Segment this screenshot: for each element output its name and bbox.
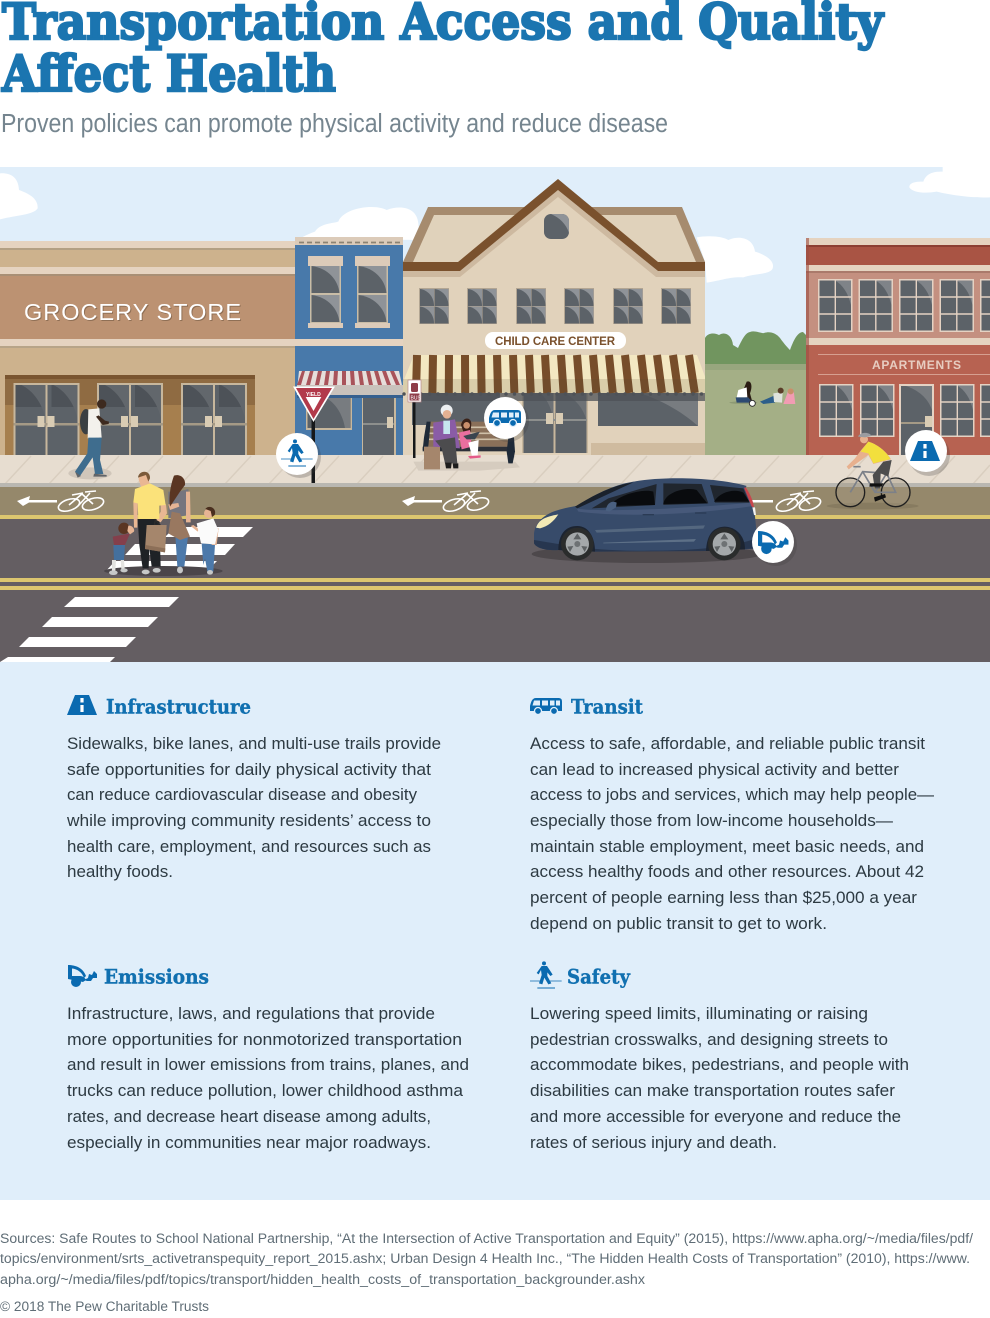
text: safety body: rates of serious injury and death. xyxy=(530,1133,777,1152)
sources: apha.org/~/media/files/pdf/topics/transport/hidden_health_costs_of_transportation_backgrounder.ashx xyxy=(0,1272,645,1287)
icon: bus xyxy=(530,698,562,714)
girl reading xyxy=(459,419,481,459)
illustration: street scene xyxy=(0,167,990,662)
heading: transit: Transit xyxy=(571,694,644,718)
people on the grass xyxy=(729,381,795,406)
text: safety body: and more accessible for everyone and reduce the xyxy=(530,1107,901,1126)
car xyxy=(532,478,762,563)
building: blue shop xyxy=(295,237,403,456)
text: infrastructure body: safe opportunities for daily physical activity that xyxy=(67,760,431,779)
text: transit body: depend on public transit to get to work. xyxy=(530,914,827,933)
crosswalk stripes xyxy=(0,527,253,662)
section: transit xyxy=(530,694,934,933)
sign: child care center xyxy=(485,332,626,349)
text: emissions body: rates, and decrease heart disease among adults, xyxy=(67,1107,431,1126)
text: transit body: maintain stable employment, meet basic needs, and xyxy=(530,837,924,856)
heading: safety: Safety xyxy=(567,964,631,988)
sidewalk xyxy=(0,455,990,487)
text: transit body xyxy=(530,734,934,933)
title: Affect Health xyxy=(1,44,336,103)
title xyxy=(1,0,885,103)
heading: infrastructure: Infrastructure xyxy=(106,694,251,718)
family crossing xyxy=(104,472,223,576)
text: emissions body xyxy=(67,1004,469,1152)
icon: emissions xyxy=(68,965,97,987)
child xyxy=(109,523,134,575)
text: transit body: access to jobs and services, which may help people— xyxy=(530,785,934,804)
sign: grocery store: GROCERY STORE xyxy=(25,300,242,326)
text: infrastructure body: healthy foods. xyxy=(67,862,173,881)
yield sign xyxy=(293,386,335,483)
elderly woman xyxy=(433,405,460,468)
sign: grocery store: GROCERY STORE xyxy=(24,299,241,325)
icon: road xyxy=(67,695,97,715)
icon badge: bus xyxy=(484,397,529,442)
icon: pedestrian xyxy=(530,961,562,988)
person walking with phone xyxy=(68,399,112,479)
subtitle: Proven policies can promote physical activity and reduce disease xyxy=(1,110,668,138)
section: emissions xyxy=(67,964,469,1152)
text: safety body: disabilities can make transportation routes safer xyxy=(530,1081,895,1100)
icon badge: emissions xyxy=(752,521,797,566)
text: emissions body: and result in lower emissions from trains, planes, and xyxy=(67,1055,469,1074)
sources xyxy=(0,1231,973,1287)
text: safety body: Lowering speed limits, illuminating or raising xyxy=(530,1004,868,1023)
text: transit body: access healthy foods and other resources. About 42 xyxy=(530,862,924,881)
boy xyxy=(191,507,219,575)
section: safety xyxy=(530,961,909,1152)
heading: emissions: Emissions xyxy=(104,964,209,988)
bike lane marking xyxy=(17,491,105,514)
awning: red stripes xyxy=(297,371,403,398)
section: infrastructure xyxy=(66,694,441,881)
bus stop sign: BUS xyxy=(410,396,421,402)
text: emissions body: trucks can reduce pollution, lower childhood asthma xyxy=(67,1081,464,1100)
text: emissions body: especially in communities near major roadways. xyxy=(67,1133,431,1152)
text: transit body: can lead to increased physical activity and better xyxy=(530,760,899,779)
bus stop sign xyxy=(408,380,421,458)
sky xyxy=(0,167,990,457)
sources: Sources: Safe Routes to School National Partnership, “At the Intersection of Active Transportation and Equity” (2015), https://www.apha.org/~/media/files/pdf/ xyxy=(0,1231,973,1246)
shopping bag xyxy=(424,447,440,469)
text: emissions body: Infrastructure, laws, and regulations that provide xyxy=(67,1004,435,1023)
text: transit body: especially those from low-income households— xyxy=(530,811,893,830)
text: infrastructure body: health care, employment, and resources such as xyxy=(67,837,431,856)
building: apartments xyxy=(806,238,990,456)
building: grocery store xyxy=(0,241,295,456)
text: transit body: percent of people earning less than $25,000 a year xyxy=(530,888,917,907)
text: emissions body: more opportunities for nonmotorized transportation xyxy=(67,1030,462,1049)
text: transit body: Access to safe, affordable, and reliable public transit xyxy=(530,734,925,753)
clouds xyxy=(0,167,990,283)
sources: topics/environment/srts_activetranspequity_report_2015.ashx; Urban Design 4 Health Inc., “The Hidden Health Costs of Transportation” (2010), https://www. xyxy=(0,1251,970,1266)
bike lane xyxy=(0,487,990,515)
sign: apartments: APARTMENTS xyxy=(872,358,961,372)
text: safety body: accommodate bikes, pedestrians, and people with xyxy=(530,1055,909,1074)
park xyxy=(705,331,806,456)
text: infrastructure body: while improving community residents’ access to xyxy=(66,811,431,830)
man xyxy=(133,472,167,574)
icon badge: pedestrian xyxy=(276,433,321,478)
bench with people xyxy=(413,405,520,471)
panel: policy descriptions xyxy=(0,662,990,1200)
awning: brown stripes xyxy=(403,355,707,401)
bike lane marking xyxy=(402,491,490,514)
icon badge: road xyxy=(905,430,950,476)
cyclist xyxy=(827,433,919,509)
sign: child care center: CHILD CARE CENTER xyxy=(495,336,616,348)
building: child care center xyxy=(403,179,707,456)
text: infrastructure body: Sidewalks, bike lanes, and multi-use trails provide xyxy=(67,734,441,753)
text: safety body: pedestrian crosswalks, and designing streets to xyxy=(530,1030,888,1049)
road xyxy=(0,515,990,662)
text: safety body xyxy=(530,1004,909,1152)
yield sign: YIELD xyxy=(306,392,321,398)
bike lane marking xyxy=(752,491,822,514)
woman xyxy=(168,475,191,573)
copyright: © 2018 The Pew Charitable Trusts xyxy=(0,1299,209,1314)
text: infrastructure body: can reduce cardiovascular disease and obesity xyxy=(67,785,417,804)
text: infrastructure body xyxy=(66,734,441,881)
